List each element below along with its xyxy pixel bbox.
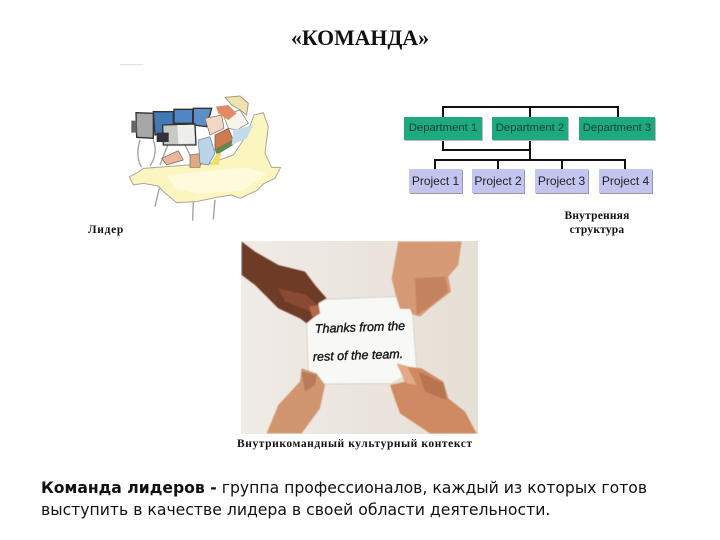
photo: four hands holding a thank-you note — [241, 241, 478, 434]
photo caption: Внутрикомандный культурный контекст — [237, 438, 473, 450]
label: internal structure: структура — [570, 224, 624, 236]
label: internal structure — [564, 210, 630, 236]
project boxes: Project 1 — [412, 174, 459, 188]
label: leader: Лидер — [88, 224, 124, 236]
project boxes: Project 3 — [538, 174, 585, 188]
definition text: Команда лидеров - группа профессионалов, каждый из которых готов — [41, 478, 647, 497]
department boxes: Department 3 — [583, 122, 651, 134]
title: «КОМАНДА» — [291, 26, 429, 50]
department boxes: Department 2 — [496, 122, 564, 134]
project boxes: Project 4 — [602, 174, 649, 188]
note handwriting: Thanks from the — [315, 319, 405, 336]
department boxes — [404, 117, 656, 141]
definition text: выступить в качестве лидера в своей области деятельности. — [41, 500, 550, 519]
project boxes: Project 2 — [474, 174, 522, 188]
project boxes — [409, 169, 653, 194]
definition text — [41, 478, 647, 519]
label: internal structure: Внутренняя — [564, 210, 630, 222]
org chart — [404, 106, 656, 194]
note handwriting: rest of the team. — [313, 347, 403, 364]
department boxes: Department 1 — [409, 122, 477, 134]
note handwriting — [313, 319, 405, 364]
